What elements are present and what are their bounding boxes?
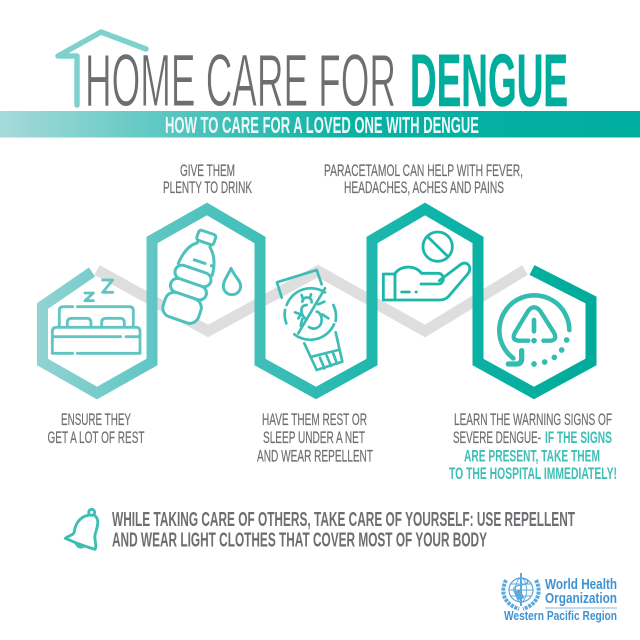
teal hexagon chain xyxy=(42,209,591,393)
caption: net and repellent: HAVE THEM REST OR xyxy=(262,410,367,429)
caption: warning signs: SEVERE DENGUE- xyxy=(453,428,541,447)
icon: warning triangle with circular arrow xyxy=(499,295,569,364)
caption: warning signs xyxy=(449,410,617,483)
caption: net and repellent: AND WEAR REPELLENT xyxy=(257,446,373,466)
self-care message xyxy=(112,508,575,552)
caption: paracetamol: PARACETAMOL CAN HELP WITH FEVER, xyxy=(324,161,523,180)
icon: WHO emblem xyxy=(503,573,539,609)
icon: house roof xyxy=(58,32,146,105)
logo: World Health Organization Western Pacific Region: World Health xyxy=(545,576,617,593)
icon: bed with z's xyxy=(52,280,140,353)
caption: ensure rest xyxy=(48,410,144,447)
caption: net and repellent xyxy=(257,410,373,466)
caption: paracetamol xyxy=(324,161,523,197)
icon: hand with pill xyxy=(383,232,470,300)
logo: World Health Organization Western Pacific Region xyxy=(503,573,617,623)
icon: bell xyxy=(65,509,98,549)
caption: ensure rest: ENSURE THEY xyxy=(61,410,131,429)
caption: paracetamol: HEADACHES, ACHES AND PAINS xyxy=(344,178,504,197)
caption: net and repellent: SLEEP UNDER A NET xyxy=(263,428,365,447)
caption: give them plenty to drink: GIVE THEM xyxy=(180,161,235,180)
title xyxy=(58,32,568,122)
logo: World Health Organization Western Pacific Region: Organization xyxy=(545,590,617,607)
grey zigzag connector xyxy=(97,270,525,331)
caption: give them plenty to drink xyxy=(163,161,252,197)
icon: repellent tube with crossed-out bug xyxy=(277,270,342,370)
caption: give them plenty to drink: PLENTY TO DRINK xyxy=(163,178,252,197)
icon: water bottle and drop xyxy=(160,226,241,326)
caption: ensure rest: GET A LOT OF REST xyxy=(48,428,144,447)
